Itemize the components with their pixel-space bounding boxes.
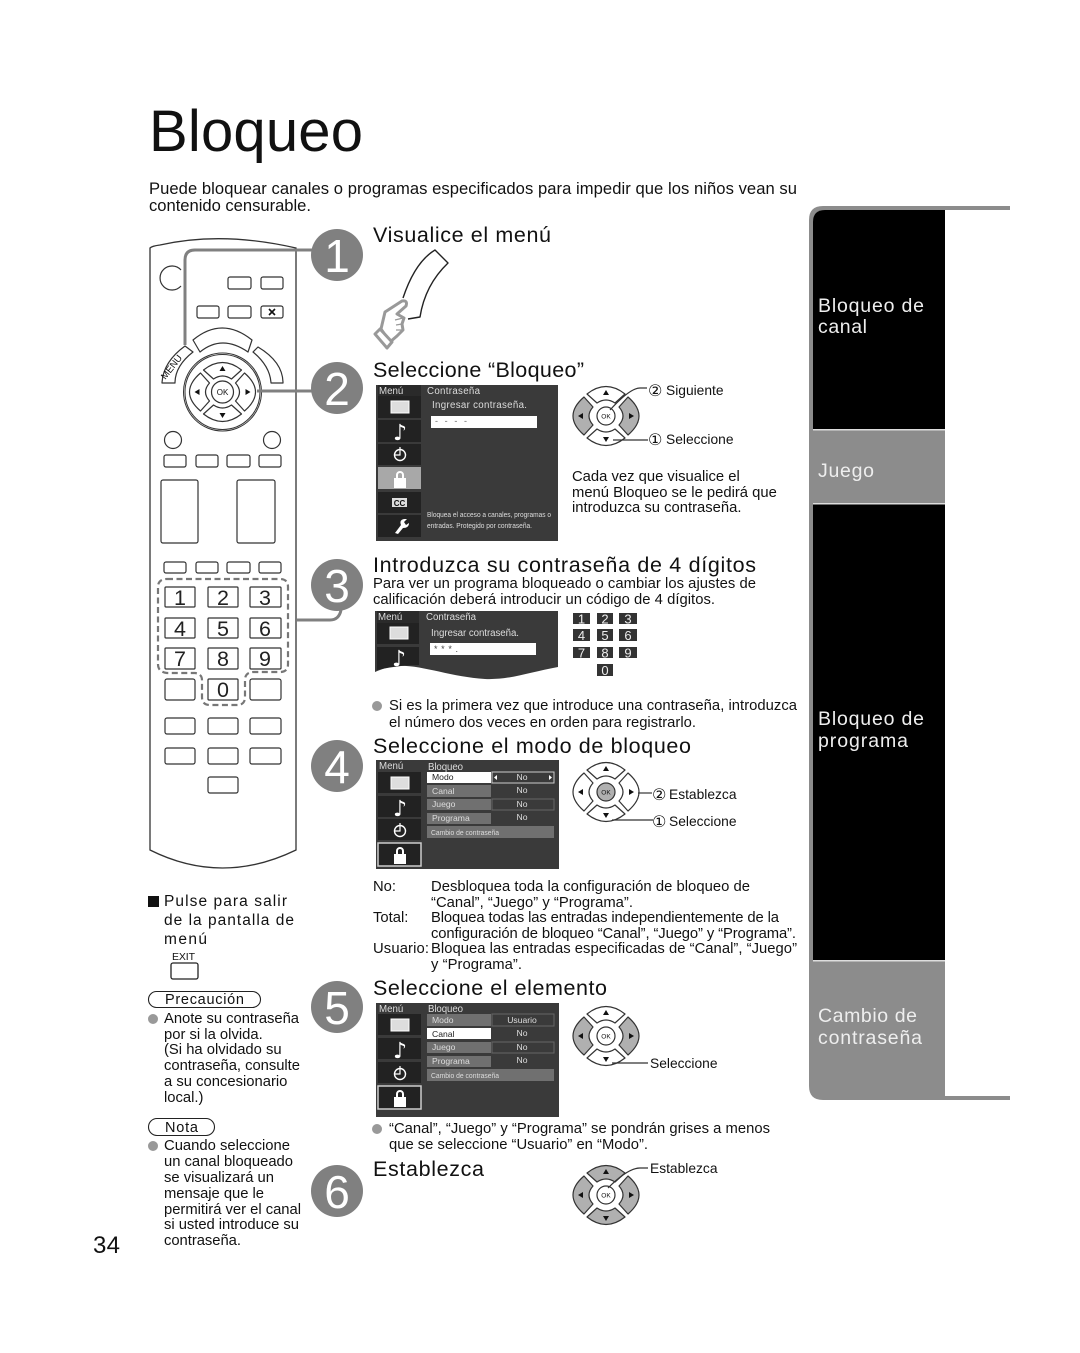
- directional pad: step 5: [573, 1006, 639, 1066]
- first-time password note: el número dos veces en orden para registrarlo.: [389, 715, 696, 731]
- note: Cuando seleccione: [164, 1138, 290, 1154]
- page number: 34: [93, 1232, 120, 1259]
- first-time password note: Si es la primera vez que introduce una contraseña, introduzca: [389, 698, 798, 714]
- tab: Juego: Juego: [818, 460, 874, 482]
- menu rows: Cambio de contraseña: [431, 830, 499, 837]
- remote lower buttons: [165, 718, 281, 793]
- numeric keys: step 3: 6: [624, 628, 632, 643]
- sidebar navigation tabs: [809, 206, 1010, 1100]
- note: [148, 1118, 301, 1249]
- heading: step 3: Introduzca su contraseña de 4 dígitos: [373, 553, 756, 577]
- step number 4: 4: [324, 741, 350, 793]
- lock mode definitions: Usuario:: [373, 941, 429, 957]
- caution note: local.): [164, 1090, 204, 1106]
- menu rows: Juego: [432, 1042, 456, 1052]
- menu rows: Modo: [432, 1015, 454, 1025]
- callouts: step 4: ②: [652, 785, 666, 804]
- menu rows: No: [516, 812, 528, 822]
- intro text: Puede bloquear canales o programas especificados para impedir que los niños vean su: [149, 179, 797, 198]
- caution note: (Si ha olvidado su: [164, 1042, 282, 1058]
- step number 1: 1: [324, 230, 350, 282]
- menu rows: Juego: [432, 799, 456, 809]
- directional pad: step 6: OK: [601, 1192, 611, 1200]
- menu screen: select item: [376, 1003, 559, 1117]
- step 3 description: Para ver un programa bloqueado o cambiar los ajustes de: [373, 576, 756, 592]
- heading: step 5: Seleccione el elemento: [373, 976, 607, 1000]
- numeric keys: step 3: 3: [624, 612, 632, 626]
- exit instruction: Pulse para salir: [164, 893, 287, 910]
- numeric keys: step 3: 7: [578, 646, 585, 660]
- menu rows: Programa: [432, 813, 470, 823]
- menu screen: password entry: Menú: [379, 386, 403, 397]
- menu screen: password typed: * * * .: [434, 644, 458, 654]
- callouts: step 2: [610, 381, 734, 449]
- title: Bloqueo: [149, 99, 363, 164]
- intro text: [149, 179, 797, 215]
- menu screen: password typed: [375, 611, 558, 679]
- step 3 description: [373, 576, 756, 608]
- password reminder text: menú Bloqueo se le pedirá que: [572, 485, 777, 501]
- lock mode definitions: y “Programa”.: [431, 957, 522, 973]
- numeric keys: step 3: [573, 612, 637, 678]
- tab: Bloqueo de canal: Bloqueo de: [818, 295, 924, 317]
- exit instruction: de la pantalla de: [164, 912, 294, 929]
- menu screen: lock mode: Menú: [379, 761, 403, 772]
- directional pad: step 4: [573, 762, 639, 822]
- menu screen: lock mode: [376, 760, 559, 869]
- menu screen: password entry: Contraseña: [427, 386, 481, 397]
- callouts: step 4: Seleccione: [669, 814, 737, 829]
- icon: hand pressing button: [375, 250, 448, 348]
- step number 1: [311, 229, 363, 282]
- remote number keys: 2: [217, 586, 229, 610]
- callouts: step 2: Siguiente: [666, 383, 724, 398]
- menu item icons: ♪: [393, 421, 407, 446]
- lock mode definitions: [373, 879, 797, 973]
- menu screen: password entry: [376, 385, 558, 541]
- step number 2: [311, 362, 363, 415]
- tab: Bloqueo de programa: [813, 504, 945, 960]
- directional pad: step 2: [573, 386, 639, 446]
- menu rows: Programa: [432, 1056, 470, 1066]
- remote number keys: [165, 586, 281, 702]
- menu item icons: CC: [394, 499, 405, 508]
- remote upper buttons: [160, 266, 283, 318]
- callouts: step 2: ①: [648, 430, 662, 449]
- directional pad: step 4: OK: [601, 790, 611, 796]
- step number 4: [311, 740, 363, 793]
- menu rows: No: [516, 772, 528, 782]
- step 3 description: calificación deberá introducir un código de 4 dígitos.: [373, 592, 715, 608]
- note: contraseña.: [164, 1233, 241, 1249]
- menu screen: password entry: entradas. Protegido por contraseña.: [427, 523, 532, 530]
- directional pad: step 5: OK: [601, 1034, 611, 1040]
- menu rows: No: [516, 785, 528, 795]
- menu rows: Cambio de contraseña: [431, 1073, 499, 1080]
- first-time password note: [372, 698, 798, 731]
- heading: step 2: Seleccione “Bloqueo”: [373, 358, 584, 382]
- caution note: Precaución: [165, 992, 244, 1008]
- lock mode definitions: Desbloquea toda la configuración de bloqueo de: [431, 879, 750, 895]
- tab: Bloqueo de programa: programa: [818, 730, 908, 752]
- caution note: Anote su contraseña: [164, 1011, 300, 1027]
- tab: Bloqueo de canal: [813, 210, 945, 429]
- dashed number keys outline: [158, 579, 288, 705]
- note: si usted introduce su: [164, 1217, 299, 1233]
- numeric keys: step 3: 0: [601, 663, 609, 678]
- menu icons: ♪: [393, 1039, 407, 1064]
- tab: Bloqueo de canal: canal: [818, 316, 867, 338]
- sidebar frame: [809, 206, 1010, 1100]
- menu screen: password typed: Ingresar contraseña.: [431, 628, 519, 639]
- remote body: [150, 239, 296, 868]
- callouts: step 4: Establezca: [669, 787, 737, 802]
- step number 5: 5: [324, 982, 350, 1034]
- connector lines from steps to remote: [185, 250, 341, 620]
- remote number keys: 8: [217, 647, 229, 671]
- menu rows: Modo: [432, 772, 454, 782]
- step number 3: [311, 559, 363, 612]
- menu rows: Canal: [432, 1029, 455, 1039]
- menu screen: lock mode: Bloqueo: [428, 762, 463, 773]
- numeric keys: step 3: 4: [578, 628, 585, 643]
- caution note: contraseña, consulte: [164, 1058, 300, 1074]
- menu rows: [427, 772, 554, 838]
- remote number keys: 6: [259, 617, 271, 641]
- lock mode definitions: “Canal”, “Juego” y “Programa”.: [431, 895, 633, 911]
- callout: step 6: Establezca: [650, 1161, 718, 1176]
- heading: step 6: Establezca: [373, 1157, 484, 1181]
- menu screen: password typed: Menú: [378, 612, 402, 623]
- menu icons: [378, 772, 421, 866]
- menu rows: No: [516, 1042, 528, 1052]
- exit button: EXIT: [172, 951, 196, 963]
- tab: Cambio de contraseña: [813, 960, 945, 1096]
- numeric keys: step 3: 1: [578, 612, 585, 626]
- lock mode definitions: configuración de bloqueo “Canal”, “Juego” y “Programa”.: [431, 926, 796, 942]
- remote directional pad with OK: [159, 328, 283, 448]
- caution note: a su concesionario: [164, 1074, 287, 1090]
- menu icons: ♪: [393, 797, 407, 822]
- menu item icons: [378, 396, 421, 537]
- step number 6: [311, 1165, 363, 1218]
- heading: step 4: Seleccione el modo de bloqueo: [373, 734, 691, 758]
- remote number keys: 7: [174, 647, 186, 671]
- grey items note: que se seleccione “Usuario” en “Modo”.: [389, 1137, 648, 1153]
- menu rows: No: [516, 799, 528, 809]
- numeric keys: step 3: 5: [601, 628, 609, 643]
- step number 5: [311, 981, 363, 1034]
- numeric keys: step 3: 9: [624, 646, 632, 660]
- remote control: [150, 239, 296, 868]
- step number 2: 2: [324, 363, 350, 415]
- lock mode definitions: Bloquea las entradas especificadas de “Canal”, “Juego”: [431, 941, 797, 957]
- menu screen: password entry: Ingresar contraseña.: [432, 400, 527, 411]
- exit button: [171, 951, 198, 979]
- remote number keys: 9: [259, 647, 271, 671]
- menu rows: No: [516, 1055, 528, 1065]
- tab: Juego: [813, 429, 945, 504]
- menu rows: [427, 1014, 554, 1081]
- remote number keys: 1: [174, 586, 186, 610]
- callout: step 5: Seleccione: [650, 1056, 718, 1071]
- callout: step 6: [608, 1161, 718, 1188]
- menu rows: No: [516, 1028, 528, 1038]
- callouts: step 2: Seleccione: [666, 432, 734, 447]
- callouts: step 2: ②: [648, 381, 662, 400]
- note: se visualizará un: [164, 1170, 274, 1186]
- lock mode definitions: Total:: [373, 910, 408, 926]
- directional pad: step 2: OK: [601, 414, 611, 420]
- tab: Cambio de contraseña: Cambio de: [818, 1005, 917, 1027]
- password reminder text: Cada vez que visualice el: [572, 469, 740, 485]
- lock mode definitions: Bloquea todas las entradas independientemente de la: [431, 910, 780, 926]
- grey items note: “Canal”, “Juego” y “Programa” se pondrán grises a menos: [389, 1121, 770, 1137]
- menu screen: select item: Bloqueo: [428, 1004, 463, 1015]
- remote number keys: 5: [217, 617, 229, 641]
- password reminder text: introduzca su contraseña.: [572, 500, 741, 516]
- menu screen: password typed: Contraseña: [426, 612, 477, 623]
- remote directional pad with OK: OK: [217, 388, 229, 397]
- menu rows: Canal: [432, 786, 455, 796]
- remote number keys: 0: [217, 678, 229, 702]
- heading: step 1: Visualice el menú: [373, 223, 551, 247]
- numeric keys: step 3: 8: [601, 646, 609, 660]
- caution note: [148, 992, 300, 1106]
- intro text: contenido censurable.: [149, 196, 311, 215]
- note: Nota: [165, 1120, 199, 1136]
- numeric keys: step 3: 2: [601, 612, 609, 626]
- remote directional pad with OK: MENU: [159, 353, 185, 382]
- caution note: por si la olvida.: [164, 1027, 263, 1043]
- menu icons: [378, 1014, 421, 1109]
- lock mode definitions: No:: [373, 879, 396, 895]
- menu screen: password typed: ♪: [392, 647, 406, 672]
- tab: Cambio de contraseña: contraseña: [818, 1027, 922, 1049]
- callout: step 5: [612, 1056, 718, 1071]
- step number 6: 6: [324, 1166, 350, 1218]
- note: permitirá ver el canal: [164, 1202, 301, 1218]
- menu rows: Usuario: [507, 1015, 537, 1025]
- menu screen: password entry: - - - -: [435, 416, 467, 426]
- callouts: step 4: ①: [652, 812, 666, 831]
- directional pad: step 6: [573, 1166, 639, 1224]
- menu screen: password entry: Bloquea el acceso a canales, programas o: [427, 512, 551, 519]
- exit instruction: menú: [164, 931, 207, 948]
- remote number keys: 3: [259, 586, 271, 610]
- grey items note: [372, 1121, 770, 1153]
- tab: Bloqueo de programa: Bloqueo de: [818, 708, 924, 730]
- note: un canal bloqueado: [164, 1154, 293, 1170]
- exit instruction: [148, 893, 294, 979]
- menu screen: select item: Menú: [379, 1004, 403, 1015]
- remote colour and input buttons: [161, 455, 281, 573]
- step number 3: 3: [324, 560, 350, 612]
- callouts: step 4: [612, 785, 737, 831]
- password reminder text: [572, 469, 777, 516]
- remote number keys: 4: [174, 617, 186, 641]
- note: mensaje que le: [164, 1186, 264, 1202]
